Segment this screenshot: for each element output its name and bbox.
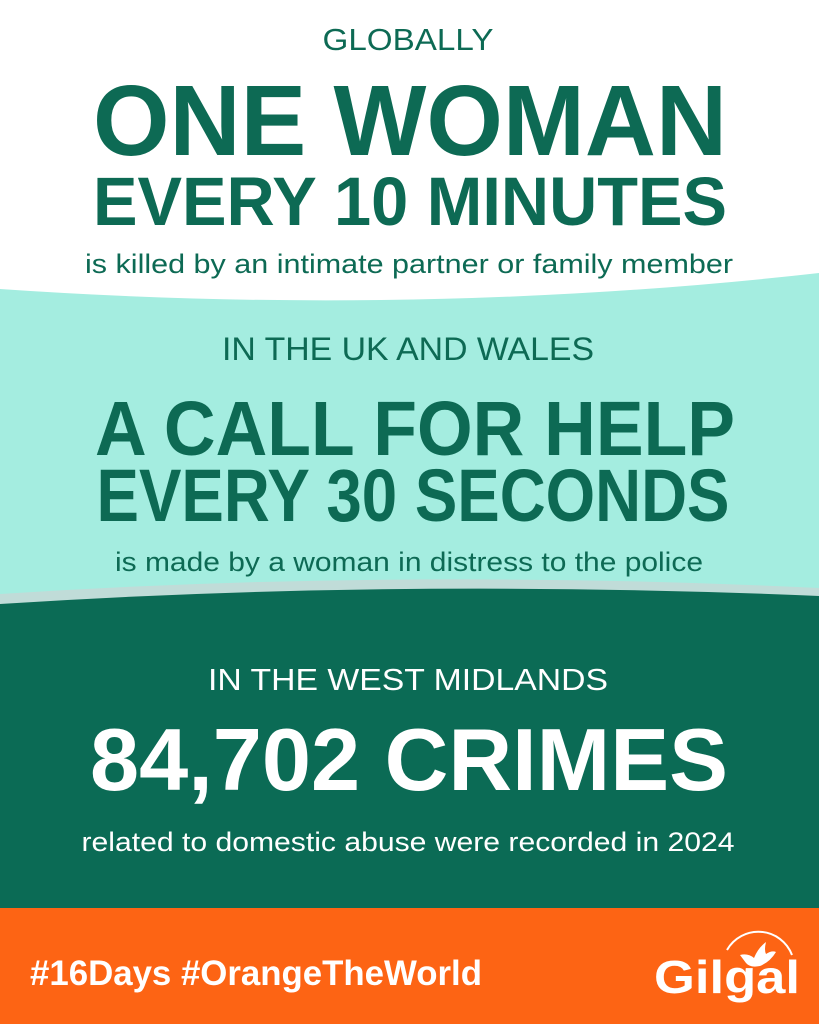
- subtext: killed: is killed by an intimate partner or family member: [85, 249, 733, 279]
- subtext: recorded: related to domestic abuse were recorded in 2024: [82, 827, 734, 857]
- headline: one woman: ONE WOMAN: [93, 65, 727, 177]
- panel: globally: [85, 22, 733, 279]
- footer band: [0, 908, 819, 1024]
- logo: gilgal: [654, 932, 800, 1003]
- heading: uk and wales: IN THE UK AND WALES: [222, 331, 594, 367]
- headline: a call for help: A CALL FOR HELP: [95, 386, 735, 472]
- heading: west midlands: IN THE WEST MIDLANDS: [208, 662, 608, 697]
- subtext: police: is made by a woman in distress to the police: [115, 547, 703, 577]
- hashtags: #16Days #OrangeTheWorld: [30, 954, 482, 993]
- headline: every 10 minutes: EVERY 10 MINUTES: [93, 163, 727, 240]
- logo: gilgal: Gilgal: [654, 951, 800, 1003]
- headline: every 30 seconds: EVERY 30 SECONDS: [96, 454, 730, 537]
- heading: globally: GLOBALLY: [322, 22, 494, 57]
- headline: crimes: 84,702 CRIMES: [90, 710, 728, 809]
- panel: west midlands: [0, 589, 819, 910]
- panel: uk and wales: [0, 273, 819, 606]
